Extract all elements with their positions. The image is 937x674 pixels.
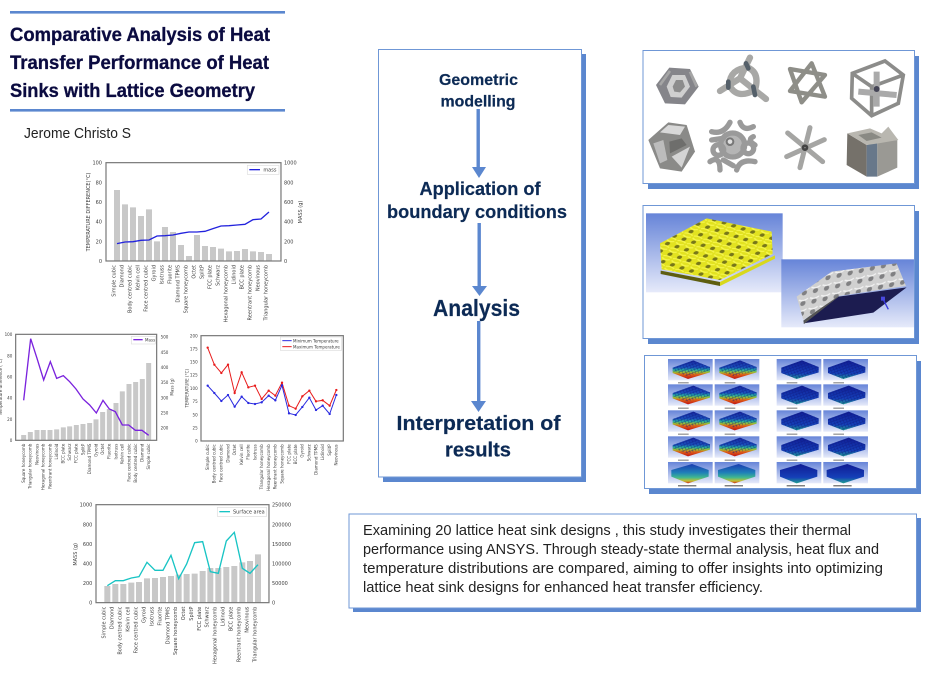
title block: [10, 11, 285, 112]
category labels: SplitP: [189, 607, 195, 621]
right axis ticks: 600: [284, 200, 293, 206]
axis titles: [86, 173, 304, 252]
category labels: Gyroid: [141, 607, 147, 623]
category labels: Fluorite: [157, 607, 163, 626]
temperature axis ticks: 125: [190, 373, 198, 378]
right axis ticks: 300: [161, 395, 169, 400]
right axis ticks: [161, 335, 169, 431]
category labels: Diamond TPMS: [87, 443, 92, 474]
category labels: Octet: [181, 607, 187, 620]
title: [10, 25, 271, 102]
legend: [280, 337, 342, 350]
category labels: Kelvin cell: [135, 265, 141, 290]
bars: [117, 190, 269, 261]
step: interpretation of results: results: [445, 438, 511, 462]
maximum markers: [208, 348, 336, 409]
category labels: Lidinoid: [231, 265, 237, 284]
category labels: Diamond TPMS: [165, 607, 171, 644]
legend: [247, 165, 279, 174]
right axis ticks: 400: [284, 220, 293, 226]
legend: Maximum Temperature: [293, 344, 340, 349]
step: application of boundary conditions: Application of: [420, 179, 542, 199]
temperature axis ticks: 175: [190, 346, 198, 351]
category labels: Kelvin cell: [120, 444, 125, 464]
surface area axis ticks: 200000: [272, 522, 291, 528]
chart: minimum and maximum temperature: [184, 333, 343, 491]
model: grey lattice with base: [781, 259, 914, 327]
left axis ticks: 100: [5, 332, 13, 337]
category labels: Simple cubic: [111, 265, 117, 297]
category labels: FCC plate: [286, 444, 291, 464]
right axis ticks: 0: [284, 259, 287, 265]
mass axis ticks: 200: [83, 581, 92, 587]
summary text: temperature distributions are compared, aiming to offer insights into optimizing: [363, 561, 883, 577]
category labels: Lidinoid: [221, 607, 227, 626]
axis titles: Mass (g): [169, 378, 174, 396]
bars: [24, 363, 149, 440]
category labels: Gyroid: [93, 443, 98, 457]
left axis ticks: 20: [7, 417, 13, 422]
category labels: Lidinoid: [54, 443, 59, 459]
legend: Surface area: [233, 509, 265, 515]
surface area axis ticks: 50000: [272, 581, 288, 587]
mass axis ticks: 1000: [80, 503, 92, 509]
title: Sinks with Lattice Geometry: [10, 81, 255, 102]
temperature contours: right columns: [777, 359, 868, 486]
category labels: Hexagonal honeycomb: [41, 443, 46, 490]
surface area axis ticks: 100000: [272, 561, 291, 567]
icon: truncated octahedron cell: [656, 68, 699, 104]
icon: tube junction cell: [720, 58, 766, 99]
chart: ascending temperature difference with mass: [0, 332, 174, 490]
category labels: Square honeycomb: [21, 443, 26, 483]
left axis ticks: [92, 161, 102, 265]
category labels: FCC plate: [197, 607, 203, 631]
surface area axis ticks: 0: [272, 601, 275, 607]
category labels: Square honeycomb: [279, 444, 284, 484]
arrow: [472, 223, 487, 296]
temperature axis ticks: 0: [195, 439, 198, 444]
category labels: Isotruss: [252, 444, 257, 460]
category labels: Hexagonal honeycomb: [223, 265, 229, 322]
category labels: Isotruss: [159, 265, 165, 284]
category labels: Reentrant honeycomb: [47, 443, 52, 489]
category labels: Triangular honeycomb: [252, 607, 258, 663]
arrow: [472, 109, 486, 178]
right axis ticks: 200: [284, 239, 293, 245]
legend: mass: [263, 167, 277, 173]
icon: cuboctahedron cell: [648, 122, 695, 172]
category labels: Square honeycomb: [183, 265, 189, 313]
category labels: [205, 444, 339, 491]
right axis ticks: 500: [161, 335, 169, 340]
category labels: Neovinous: [334, 444, 339, 466]
mass axis ticks: [80, 503, 92, 607]
left axis ticks: 80: [96, 180, 102, 186]
maximum temperature line: [208, 348, 336, 409]
left axis ticks: 100: [92, 161, 102, 167]
summary text: Examining 20 lattice heat sink designs , this study investigates their thermal: [363, 523, 851, 539]
right axis ticks: 1000: [284, 161, 297, 167]
axis title: MASS (g): [73, 543, 79, 566]
category labels: SplitP: [199, 265, 205, 279]
category labels: Square honeycomb: [173, 607, 179, 655]
category labels: Diamond TPMS: [175, 265, 181, 303]
axis titles: MASS (g): [298, 201, 304, 223]
category labels: Isotruss: [113, 444, 118, 459]
panel: thermal simulation results: [644, 356, 921, 494]
chart: mass and surface area: [73, 503, 291, 664]
model: yellow lattice: [646, 213, 783, 292]
category labels: [111, 265, 269, 322]
icon: gyroid cell: [710, 122, 755, 170]
category labels: Reentrant honeycomb: [247, 265, 253, 320]
category labels: Diamond: [225, 444, 230, 463]
category labels: Schwarz: [215, 265, 221, 286]
summary text: [363, 523, 883, 596]
temperature axis ticks: 100: [190, 386, 198, 391]
category labels: Octet: [232, 444, 237, 455]
step: application of boundary conditions: [387, 179, 567, 222]
mass axis ticks: 0: [89, 601, 92, 607]
step: application of boundary conditions: boundary conditions: [387, 202, 567, 222]
category labels: Diamond: [119, 265, 125, 288]
surface area axis ticks: [272, 503, 291, 607]
bars: [107, 554, 258, 603]
panel: lattice unit cells: [643, 50, 919, 189]
right axis ticks: [284, 161, 297, 265]
category labels: Body centred cubic: [212, 444, 217, 483]
category labels: Gyroid: [151, 265, 157, 281]
temperature axis ticks: 50: [193, 412, 198, 417]
category labels: [21, 443, 151, 490]
minimum markers: [208, 385, 336, 415]
panel: process flow: [378, 50, 586, 482]
icon: star cell: [790, 63, 825, 102]
category labels: Simple cubic: [102, 606, 108, 638]
category labels: SplitP: [327, 444, 332, 456]
category labels: Octet: [191, 265, 197, 279]
icon: honeycomb block cell: [847, 127, 898, 177]
category labels: Simple cubic: [205, 444, 210, 470]
category labels: Diamond TPMS: [313, 444, 318, 475]
category labels: BCC plate: [239, 265, 245, 290]
category labels: Simple cubic: [146, 444, 151, 469]
axis titles: TEMPERATURE DIFFERENCE(°C): [86, 173, 92, 252]
mass line: [24, 339, 149, 435]
category labels: Body centred cubic: [118, 606, 124, 655]
legend: Mass: [145, 337, 155, 342]
legend: [217, 507, 267, 516]
left axis ticks: 60: [7, 374, 13, 379]
category labels: BCC plate: [293, 444, 298, 464]
arrow: [471, 321, 486, 412]
author: Jerome Christo S: [24, 126, 131, 142]
surface area line: [107, 532, 258, 586]
step: interpretation of results: Interpretation of: [396, 412, 561, 435]
category labels: Diamond: [110, 607, 116, 629]
mass axis ticks: 600: [83, 542, 92, 548]
right axis ticks: 400: [161, 365, 169, 370]
step: analysis: Analysis: [433, 295, 520, 321]
category labels: Schwarz: [307, 444, 312, 461]
category labels: Triangular honeycomb: [28, 443, 33, 490]
right axis ticks: 450: [161, 350, 169, 355]
category labels: Reentrant honeycomb: [237, 607, 243, 662]
left axis ticks: 20: [96, 239, 102, 245]
category labels: Neovinous: [255, 265, 261, 291]
mass line: [117, 212, 269, 244]
step: geometric modelling: modelling: [440, 94, 516, 110]
left axis ticks: 0: [10, 438, 13, 443]
category labels: Schwarz: [205, 606, 211, 628]
right axis ticks: 200: [161, 426, 169, 431]
category labels: Gyroid: [300, 444, 305, 458]
category labels: Hexagonal honeycomb: [213, 607, 219, 664]
left axis ticks: 40: [96, 220, 102, 226]
category labels: FCC plate: [74, 443, 79, 463]
temperature contours: left columns: [668, 359, 759, 486]
left axis ticks: 40: [7, 396, 13, 401]
step: interpretation of results: [396, 412, 561, 462]
category labels: Diamond: [140, 443, 145, 462]
step: geometric modelling: Geometric: [439, 72, 518, 89]
category labels: Face centred cubic: [126, 444, 131, 482]
summary text: lattice heat sink designs for enhanced heat transfer efficiency.: [363, 580, 763, 596]
left axis ticks: 60: [96, 200, 102, 206]
category labels: Kelvin cell: [239, 444, 244, 465]
category labels: Body centred cubic: [127, 265, 133, 313]
category labels: BCC plate: [61, 443, 66, 464]
temperature axis ticks: [190, 333, 198, 444]
left axis ticks: 80: [7, 353, 13, 358]
summary text: performance using ANSYS. Through steady-state thermal analysis, heat flux and: [363, 542, 879, 558]
axis title: TEMPERATURE (°C): [184, 369, 189, 409]
right axis ticks: 350: [161, 380, 169, 385]
axis titles: [0, 358, 174, 416]
category labels: BCC plate: [229, 607, 235, 631]
title: Transfer Performance of Heat: [10, 53, 270, 74]
icon: cubic frame cell: [852, 61, 903, 116]
temperature axis ticks: 150: [190, 359, 198, 364]
category labels: Triangular honeycomb: [263, 265, 269, 322]
mass axis ticks: 800: [83, 522, 92, 528]
category labels: Kelvin cell: [126, 607, 132, 632]
minimum temperature line: [208, 385, 336, 415]
category labels: Fluorite: [246, 444, 251, 460]
category labels: Body centred cubic: [133, 444, 138, 483]
category labels: Fluorite: [107, 443, 112, 459]
category labels: Triangular honeycomb: [259, 444, 264, 490]
category labels: Face centred cubic: [219, 444, 224, 482]
temperature axis ticks: 25: [193, 425, 198, 430]
category labels: Face centred cubic: [143, 265, 149, 312]
category labels: Face centred cubic: [133, 606, 139, 653]
legend: [131, 336, 155, 344]
panel: study summary: [349, 514, 921, 612]
right axis ticks: 800: [284, 180, 293, 186]
category labels: Fluorite: [167, 265, 173, 284]
title: Comparative Analysis of Heat: [10, 25, 271, 46]
category labels: FCC plate: [207, 265, 213, 289]
category labels: Hexagonal honeycomb: [266, 444, 271, 491]
mass axis ticks: 400: [83, 561, 92, 567]
category labels: Neovinous: [244, 606, 250, 633]
category labels: Isotruss: [149, 606, 155, 626]
left axis ticks: [5, 332, 13, 443]
temperature axis ticks: 75: [193, 399, 198, 404]
right axis ticks: 250: [161, 410, 169, 415]
surface area axis ticks: 150000: [272, 542, 291, 548]
left axis ticks: 0: [99, 259, 102, 265]
chart: temperature difference and mass: [86, 161, 304, 322]
legend: Minimum Temperature: [293, 338, 339, 343]
surface area axis ticks: 250000: [272, 503, 291, 509]
category labels: [102, 606, 258, 664]
category labels: Reentrant honeycomb: [273, 444, 278, 489]
temperature axis ticks: 200: [190, 333, 198, 338]
icon: six-arm cell: [787, 128, 824, 168]
category labels: Schwarz: [67, 444, 72, 461]
category labels: SplitP: [80, 443, 85, 455]
step: geometric modelling: [439, 72, 518, 110]
category labels: Neovinous: [34, 444, 39, 465]
category labels: Octet: [100, 443, 105, 455]
category labels: Lidinoid: [320, 444, 325, 460]
panel: boundary condition models: [643, 206, 919, 344]
